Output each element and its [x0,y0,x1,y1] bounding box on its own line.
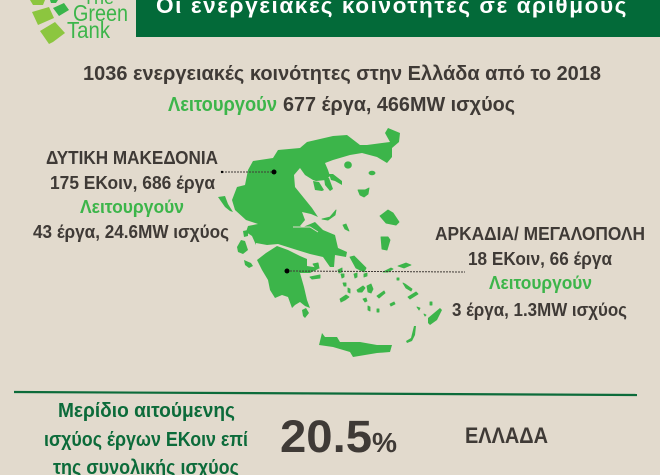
callout text: Arcadia / Megalopoli [435,224,645,320]
Euboean channel [293,227,318,232]
Aegean islands [310,162,432,316]
callout text: Arcadia / Megalopoli: 18 ΕΚοιν, 66 έργα [468,249,612,269]
headline stats: Λειτουργούν [168,94,277,116]
headline stats: 677 έργα, 466MW ισχύος [283,94,515,116]
callout text: Western Macedonia: 175 ΕΚοιν, 686 έργα [50,173,215,193]
headline stats [83,63,601,116]
share label: ισχύος έργων ΕΚοιν επί [44,429,248,451]
share label [44,400,248,475]
callout text: Western Macedonia: ΔΥΤΙΚΗ ΜΑΚΕΔΟΝΙΑ [46,148,218,168]
logo: The Green Tank [30,0,128,44]
divider line [14,392,637,395]
callout: Western Macedonia leader [221,170,276,174]
Rhodes [428,308,442,325]
callout text: Arcadia / Megalopoli: 3 έργα, 1.3MW ισχύος [452,300,627,320]
Chalkidiki fingers [329,174,342,185]
callout text: Western Macedonia: Λειτουργούν [80,197,184,217]
share value: % [372,427,397,458]
title banner [136,0,660,37]
callout text: Arcadia / Megalopoli: Λειτουργούν [489,273,592,293]
logo: The Green Tank: Green [73,0,128,26]
share value: 20.5 [280,411,372,462]
map of Greece [218,128,442,357]
mainland north and central Greece [232,128,400,267]
callout: Arcadia leader [284,268,465,274]
Ionian islands [218,196,233,212]
callout text: Western Macedonia: 43 έργα, 24.6MW ισχύος [33,222,229,242]
callout text: Arcadia / Megalopoli: ΑΡΚΑΔΙΑ/ ΜΕΓΑΛΟΠΟΛΗ [435,224,645,244]
Crete [319,333,392,357]
logo: The Green Tank: Tank [67,17,110,43]
Karpathos [406,326,416,343]
Peloponnese [257,246,320,308]
headline stats: 1036 ενεργειακές κοινότητες στην Ελλάδα από το 2018 [83,63,601,85]
callout text: Western Macedonia [33,148,229,242]
share label: Μερίδιο αιτούμενης [58,400,235,422]
region label: ΕΛΛΑΔΑ [465,423,548,448]
